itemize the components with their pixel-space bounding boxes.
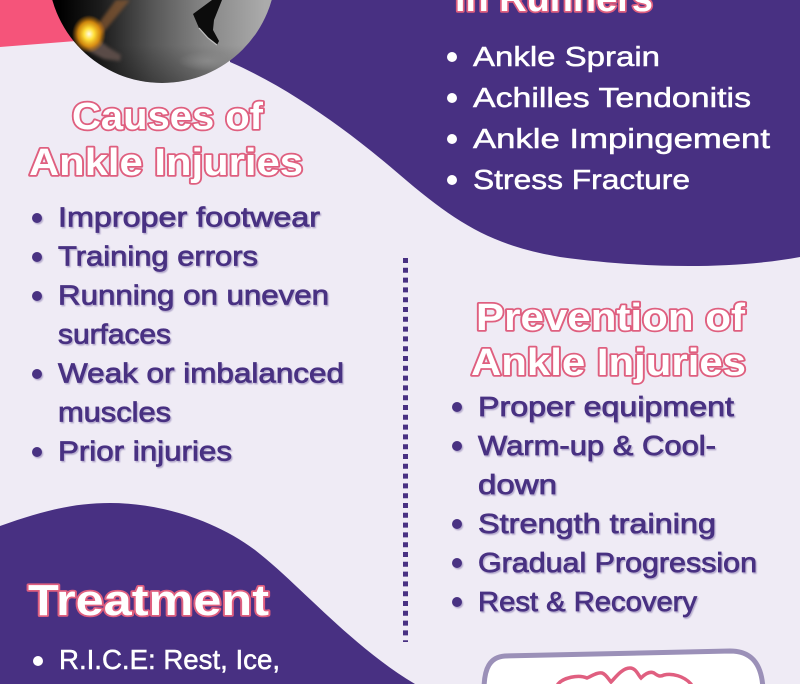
list: injuries in runners: Achilles Tendonitis (473, 82, 751, 113)
list: injuries in runners (447, 41, 770, 195)
list: causes: Improper footwear (58, 202, 320, 232)
heading: causes (29, 96, 303, 184)
ankle glow (72, 15, 106, 53)
list: injuries in runners: Stress Fracture (473, 164, 690, 195)
dotted divider (403, 258, 408, 642)
list: prevention: Gradual Progression (478, 547, 757, 578)
list: prevention (452, 391, 757, 617)
other foot (193, 0, 222, 45)
list: injuries in runners: Ankle Impingement (473, 123, 770, 154)
heading: treatment: Treatment (28, 576, 269, 625)
list: causes: Running on uneven (58, 280, 329, 310)
callout lettering tops, cropped (558, 668, 691, 684)
heading: prevention (471, 297, 746, 384)
list: causes: Training errors (58, 240, 258, 272)
list: prevention: Rest & Recovery (478, 586, 697, 617)
photo: glowing ankle in circle (52, 0, 272, 83)
list: prevention: Strength training (478, 508, 716, 539)
purple top-right wave panel (230, 0, 800, 266)
heading: prevention: Ankle Injuries (471, 342, 746, 384)
list: causes: Prior injuries (58, 436, 232, 466)
foot (84, 38, 121, 61)
heading: causes: Ankle Injuries (29, 142, 303, 184)
list: causes (32, 202, 344, 466)
purple treatment wave panel (0, 503, 415, 684)
list: treatment: R.I.C.E: Rest, Ice, (59, 644, 280, 675)
list: causes: Weak or imbalanced (58, 358, 344, 388)
list: prevention: Proper equipment (478, 391, 734, 422)
heading: prevention: Prevention of (476, 297, 745, 339)
list: injuries in runners: Ankle Sprain (473, 41, 660, 72)
pink corner shape (0, 0, 76, 47)
heading: causes: Causes of (72, 96, 263, 138)
floor highlight (186, 56, 220, 68)
list: prevention: Warm-up & Cool- (478, 430, 716, 461)
list: causes: muscles (58, 396, 171, 428)
callout box, cropped at the bottom edge (484, 651, 763, 684)
injured leg (97, 0, 130, 34)
list: causes: surfaces (58, 318, 171, 350)
list: prevention: down (478, 469, 557, 500)
